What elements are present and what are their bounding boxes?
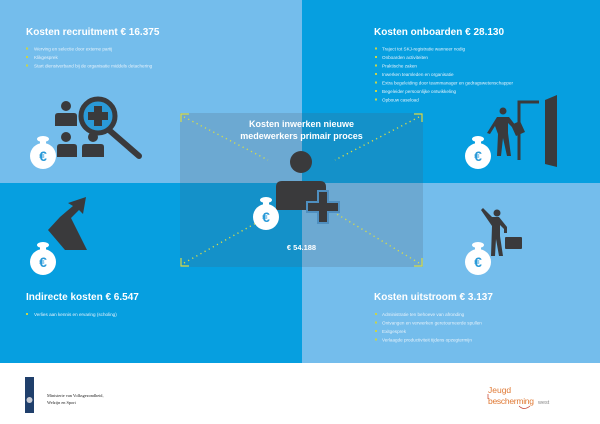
panel: onboarden: Praktische zaken	[382, 64, 417, 68]
panel: uitstroom	[374, 208, 522, 342]
icon: money bag indirect	[30, 242, 56, 275]
icon: money bag uitstroom	[465, 242, 491, 275]
panel: recruitment: Werving en selectie door externe partij	[34, 46, 112, 52]
panel: recruitment	[26, 27, 160, 169]
panel: uitstroom: Administratie ten behoeve van afronding	[382, 312, 465, 317]
panel: onboarden: Kosten onboarden € 28.130	[374, 27, 504, 38]
panel: indirecte kosten: Verlies aan kennis en ervaring (scholing)	[34, 312, 117, 317]
panel: onboarden: Inwerken teamleden en organisatie	[382, 72, 454, 77]
panel: onboarden: Onboarden activiteiten	[382, 55, 428, 60]
logo: jeugdbescherming west: Jeugd	[488, 385, 511, 395]
panel: indirecte kosten: Indirecte kosten € 6.547	[26, 292, 139, 303]
panel: uitstroom: Verlaagde productiviteit tijdens opzegtermijn	[382, 338, 472, 342]
panel: onboarden: Opbouw caseload	[382, 98, 419, 102]
panel: onboarden: Extra begeleiding door teammanager en gedragswetenschapper	[382, 80, 513, 86]
icon: money bag center	[253, 197, 279, 230]
panel: recruitment: Start dienstverband bij de organisatie middels detachering	[34, 64, 153, 68]
icon: person entering door	[487, 95, 557, 167]
icon: recruitment people and magnifier	[55, 99, 139, 157]
panel: onboarden: Traject tot SKJ-registratie wanneer nodig	[382, 46, 466, 52]
panel: center total: Kosten inwerken nieuwe	[249, 119, 354, 129]
panel: onboarden: Begeleider persoonlijke ontwikkeling	[382, 89, 456, 94]
panel: uitstroom: Exitgesprek	[382, 329, 407, 334]
panel: uitstroom: Kosten uitstroom € 3.137	[374, 292, 493, 303]
panel: recruitment: Kosten recruitment € 16.375	[26, 27, 160, 38]
panel: indirecte kosten	[26, 197, 139, 317]
icon: arrow	[48, 197, 87, 250]
logo: ministerie: Welzijn en Sport	[47, 400, 77, 405]
icon: money bag recruitment	[30, 136, 56, 169]
logo: jeugdbescherming west	[488, 385, 550, 408]
panel: center total: medewerkers primair proces	[240, 131, 363, 141]
logo: jeugdbescherming west: west	[537, 400, 550, 406]
icon: person leaving with suitcase	[481, 208, 522, 256]
panel: recruitment: Klikgesprek	[34, 55, 58, 60]
icon: person with plus	[276, 151, 339, 223]
logo: ministerie: Ministerie van Volksgezondheid,	[47, 393, 104, 399]
logo: jeugdbescherming west: bescherming	[488, 396, 534, 406]
panel: center total: € 54.188	[287, 243, 316, 252]
logo: ministerie	[25, 377, 104, 413]
panel: uitstroom: Ontvangen en verwerken geretourneerde spullen	[382, 320, 482, 326]
panel: onboarden	[374, 27, 557, 169]
icon: money bag onboarden	[465, 136, 491, 169]
panel: center total	[180, 113, 423, 267]
